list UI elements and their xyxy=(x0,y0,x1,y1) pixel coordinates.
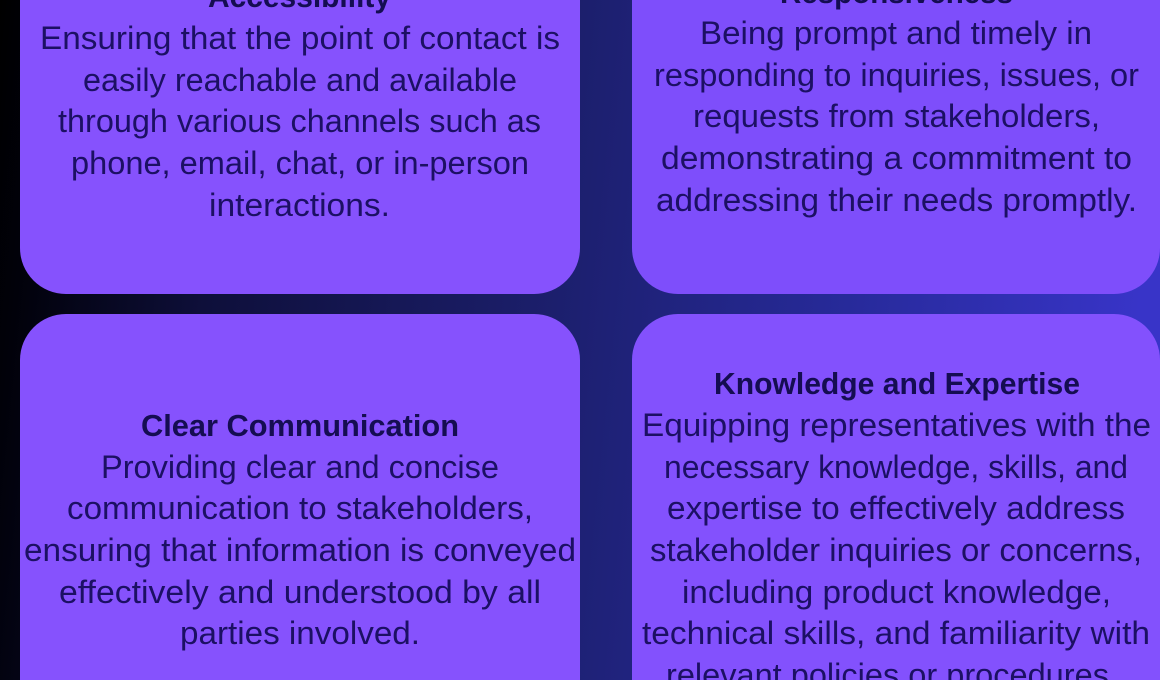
text block: accessibility description xyxy=(40,20,560,223)
text block: knowledge and expertise description: including product knowledge, xyxy=(682,574,1111,610)
text block: responsiveness description: requests from stakeholders, xyxy=(693,98,1100,134)
panel: responsiveness xyxy=(632,0,1160,294)
text block: clear communication description xyxy=(24,449,576,651)
panel: accessibility xyxy=(20,0,580,294)
text block: accessibility description: interactions. xyxy=(209,187,390,223)
text block: clear communication description: communication to stakeholders, xyxy=(67,490,533,526)
text block: clear communication description: Providing clear and concise xyxy=(101,449,499,485)
text block: knowledge and expertise description: technical skills, and familiarity with xyxy=(642,615,1150,651)
text block: knowledge and expertise description xyxy=(642,407,1151,680)
text block: responsiveness description: demonstrating a commitment to xyxy=(661,140,1132,176)
text block: clear communication description: effectively and understood by all xyxy=(59,574,541,610)
text block: knowledge and expertise description: necessary knowledge, skills, and xyxy=(664,449,1128,485)
text block: accessibility description: phone, email, chat, or in-person xyxy=(71,145,529,181)
panel: knowledge and expertise xyxy=(632,314,1160,680)
text block: responsiveness description: addressing their needs promptly. xyxy=(656,182,1137,218)
text block: responsiveness description: Being prompt and timely in xyxy=(700,15,1092,51)
text block: responsiveness description xyxy=(654,15,1139,218)
heading: knowledge and expertise: Knowledge and Expertise xyxy=(714,366,1080,401)
text block: clear communication description: ensuring that information is conveyed xyxy=(24,532,576,568)
text block: accessibility description: Ensuring that the point of contact is xyxy=(40,20,560,56)
panel: clear communication xyxy=(20,314,580,680)
text block: responsiveness description: responding to inquiries, issues, or xyxy=(654,57,1139,93)
text block: knowledge and expertise description: stakeholder inquiries or concerns, xyxy=(650,532,1142,568)
text block: clear communication description: parties involved. xyxy=(180,615,420,651)
text block: knowledge and expertise description: Equipping representatives with the xyxy=(642,407,1151,443)
text block: accessibility description: easily reachable and available xyxy=(83,62,517,98)
text block: accessibility description: through various channels such as xyxy=(58,103,541,139)
text block: knowledge and expertise description: expertise to effectively address xyxy=(667,490,1125,526)
heading: clear communication: Clear Communication xyxy=(141,408,459,443)
